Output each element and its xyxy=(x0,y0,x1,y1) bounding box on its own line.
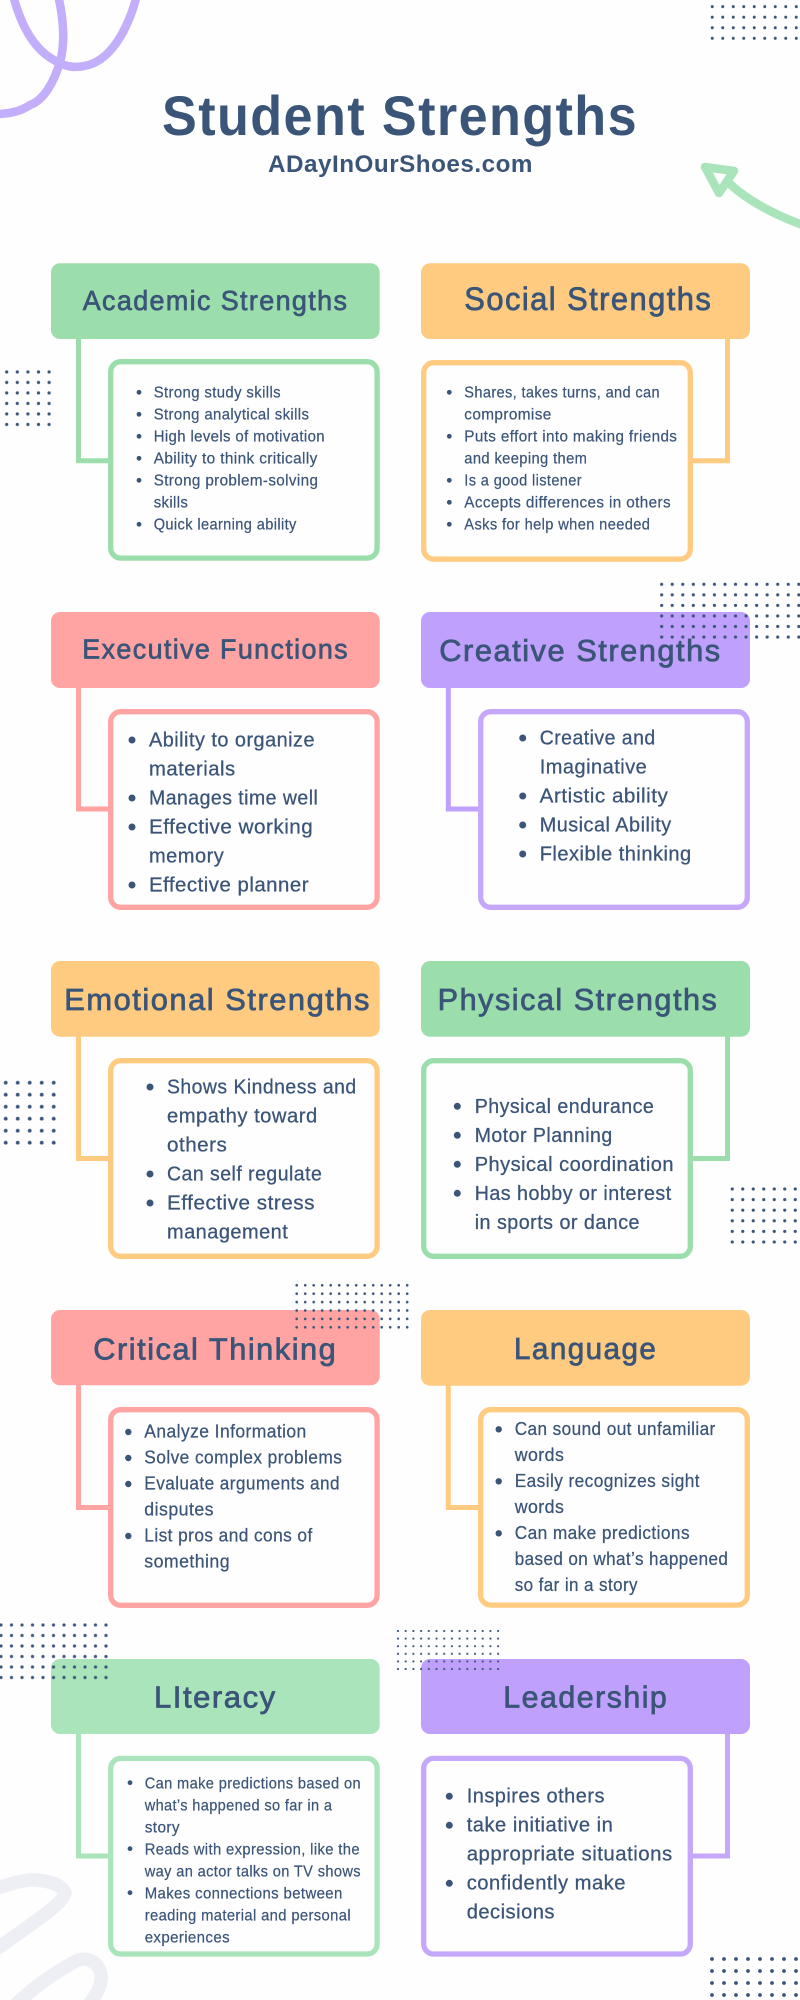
connector xyxy=(691,1734,728,1856)
panel: Leadership xyxy=(421,1659,750,1954)
bullet list: Analyze Information xyxy=(144,1421,307,1442)
heading: Leadership xyxy=(503,1680,668,1714)
panel: Social Strengths xyxy=(421,263,750,559)
heading box xyxy=(421,961,750,1037)
bullet list: List pros and cons of xyxy=(144,1525,313,1546)
bullet list: something xyxy=(144,1551,230,1572)
panel: Academic Strengths xyxy=(51,263,380,558)
panel: Critical Thinking xyxy=(51,1310,380,1605)
connector xyxy=(78,688,110,809)
bullet list: Shares, takes turns, and can xyxy=(464,385,660,402)
bullet list: Reads with expression, like the xyxy=(145,1841,360,1858)
heading: Language xyxy=(514,1332,657,1366)
heading: Emotional Strengths xyxy=(64,983,371,1017)
bullet list xyxy=(128,729,318,897)
bullet list: others xyxy=(167,1134,227,1157)
content box xyxy=(481,712,747,907)
subtitle: ADayInOurShoes.com xyxy=(268,151,533,178)
bullet list: Musical Ability xyxy=(540,814,672,837)
connector xyxy=(78,1385,110,1508)
panel: Language xyxy=(421,1310,750,1605)
heading box xyxy=(51,612,380,688)
heading: Physical Strengths xyxy=(438,983,718,1017)
heading: Critical Thinking xyxy=(93,1332,337,1366)
bullet list: Ability to think critically xyxy=(154,451,318,468)
connector xyxy=(691,339,728,461)
bullet list: based on what’s happened xyxy=(515,1548,728,1569)
connector xyxy=(448,1385,480,1508)
bullet list: Solve complex problems xyxy=(144,1447,342,1468)
content box xyxy=(111,1061,377,1256)
panel: Executive Functions xyxy=(51,612,380,907)
bullet list xyxy=(128,1775,361,1946)
bullet list: Easily recognizes sight xyxy=(515,1470,700,1491)
bullet list: Asks for help when needed xyxy=(464,517,650,534)
decoration: green arrow top right xyxy=(705,167,800,226)
bullet list xyxy=(496,1418,728,1595)
content box xyxy=(424,1061,690,1256)
bullet list: Flexible thinking xyxy=(540,843,692,866)
title: Student Strengths xyxy=(162,84,638,147)
decoration: grey scribble bottom left xyxy=(0,1880,101,2000)
connector xyxy=(691,1036,728,1158)
bullet list: Accepts differences in others xyxy=(464,495,671,512)
bullet list: Creative and xyxy=(540,727,656,750)
bullet list: Strong problem-solving xyxy=(154,473,318,490)
bullet list: in sports or dance xyxy=(475,1211,640,1234)
heading box xyxy=(421,263,750,339)
bullet list: Quick learning ability xyxy=(154,517,297,534)
bullet list: Effective planner xyxy=(149,874,309,897)
heading: Academic Strengths xyxy=(83,285,348,316)
heading box xyxy=(421,1310,750,1386)
content box xyxy=(481,1410,747,1605)
bullet list: Can make predictions xyxy=(515,1522,690,1543)
content box xyxy=(111,1758,377,1954)
bullet list: management xyxy=(167,1221,288,1244)
bullet list: decisions xyxy=(467,1901,555,1924)
bullet list: and keeping them xyxy=(464,451,587,468)
bullet list: words xyxy=(514,1496,564,1517)
content box xyxy=(111,1410,377,1605)
bullet list: compromise xyxy=(464,407,552,424)
heading box xyxy=(51,1659,380,1734)
bullet list: story xyxy=(145,1819,180,1836)
heading: LIteracy xyxy=(154,1681,277,1715)
bullet list: reading material and personal xyxy=(145,1907,351,1924)
bullet list: Motor Planning xyxy=(475,1124,613,1147)
bullet list: what’s happened so far in a xyxy=(144,1797,332,1814)
bullet list: Imaginative xyxy=(540,756,647,779)
bullet list: memory xyxy=(149,845,225,868)
content box xyxy=(424,363,690,559)
bullet list: experiences xyxy=(145,1929,230,1946)
bullet list: materials xyxy=(149,758,236,781)
bullet list xyxy=(519,727,692,866)
bullet list xyxy=(447,385,677,534)
bullet list: Has hobby or interest xyxy=(475,1182,672,1205)
decoration: purple scribble top left xyxy=(0,0,137,114)
bullet list xyxy=(446,1785,673,1924)
content box xyxy=(111,362,377,558)
bullet list: Is a good listener xyxy=(464,473,582,490)
bullet list: Inspires others xyxy=(467,1785,605,1808)
bullet list: appropriate situations xyxy=(467,1843,673,1866)
bullet list xyxy=(125,1421,342,1572)
bullet list: Strong analytical skills xyxy=(154,407,309,424)
heading: Executive Functions xyxy=(82,633,349,664)
bullet list: empathy toward xyxy=(167,1105,318,1128)
bullet list: Manages time well xyxy=(149,787,318,810)
bullet list: skills xyxy=(154,495,188,512)
bullet list: Strong study skills xyxy=(154,385,281,402)
panel: Literacy xyxy=(51,1659,380,1954)
heading: Social Strengths xyxy=(464,281,712,317)
bullet list xyxy=(454,1095,674,1234)
panel: Emotional Strengths xyxy=(51,961,380,1256)
bullet list: Artistic ability xyxy=(540,785,669,808)
connector xyxy=(78,1036,110,1158)
bullet list: take initiative in xyxy=(467,1814,613,1837)
heading: Creative Strengths xyxy=(439,634,722,668)
content box xyxy=(111,712,377,907)
bullet list: Evaluate arguments and xyxy=(144,1473,340,1494)
bullet list: Ability to organize xyxy=(149,729,315,752)
bullet list: Can sound out unfamiliar xyxy=(515,1418,716,1439)
heading box xyxy=(51,1310,380,1385)
bullet list: way an actor talks on TV shows xyxy=(144,1863,361,1880)
heading box xyxy=(51,263,380,339)
bullet list: Effective working xyxy=(149,816,313,839)
bullet list: High levels of motivation xyxy=(154,429,325,446)
bullet list: Makes connections between xyxy=(145,1885,343,1902)
connector xyxy=(78,339,110,461)
bullet list: Physical coordination xyxy=(475,1153,674,1176)
connector xyxy=(448,688,480,809)
bullet list: confidently make xyxy=(467,1872,626,1895)
bullet list: disputes xyxy=(144,1499,214,1520)
bullet list: Shows Kindness and xyxy=(167,1076,357,1099)
bullet list: Effective stress xyxy=(167,1192,315,1215)
bullet list xyxy=(146,1076,357,1244)
heading box xyxy=(421,612,750,688)
bullet list: Can make predictions based on xyxy=(145,1775,361,1792)
panel: Physical Strengths xyxy=(421,961,750,1256)
bullet list xyxy=(137,385,325,534)
heading box xyxy=(51,961,380,1037)
content box xyxy=(424,1758,690,1954)
bullet list: words xyxy=(514,1444,564,1465)
panel: Creative Strengths xyxy=(421,612,750,907)
bullet list: Physical endurance xyxy=(475,1095,654,1118)
bullet list: so far in a story xyxy=(515,1574,638,1595)
bullet list: Can self regulate xyxy=(167,1163,322,1186)
connector xyxy=(78,1734,110,1856)
heading box xyxy=(421,1659,750,1734)
bullet list: Puts effort into making friends xyxy=(464,429,677,446)
